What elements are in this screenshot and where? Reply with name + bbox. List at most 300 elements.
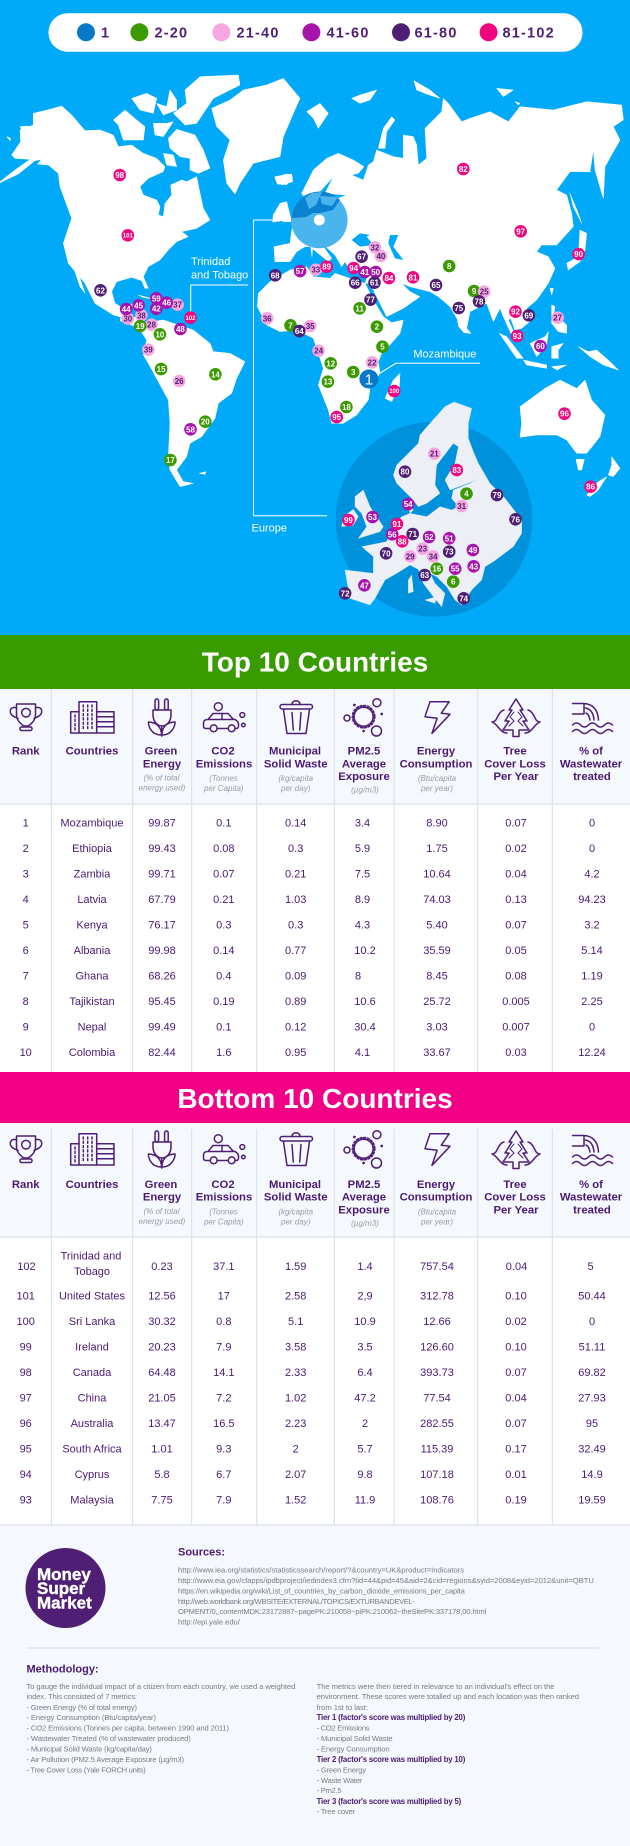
table rows: China [78,1393,107,1405]
table rows: 0.12 [285,1022,306,1034]
rank markers: world: 60 [536,342,545,351]
table rows: 2.25 [581,996,603,1008]
rank markers: europe inset: 72 [341,589,350,598]
table rows: 0 [589,1316,595,1328]
rank markers: world: 65 [432,281,441,290]
table rows: 2 [362,1418,368,1430]
table rows: 0.07 [505,1367,527,1379]
rank markers: europe inset: 49 [468,546,478,555]
table rows: 5.1 [288,1316,303,1328]
table rows: 10.2 [354,945,376,957]
rank markers: world: 78 [475,297,484,306]
table header labels: CO2 [211,746,235,758]
table rows: 8.45 [426,971,448,983]
table header labels: (% of total [143,774,180,782]
table header labels: Green [145,746,177,758]
rank markers: europe inset: 34 [429,552,438,561]
table header labels: Solid Waste [264,758,328,770]
table header labels: Solid Waste [264,1192,328,1204]
table rows: 6 [23,945,29,957]
rank markers: world: 97 [516,227,526,236]
table header labels: Wastewater [560,1192,623,1204]
inland seas [352,233,403,260]
rank markers: world: 67 [357,253,367,262]
methodology left column: index. This consisted of 7 metrics: [26,1692,137,1701]
table rows: 95 [586,1418,598,1430]
methodology right column: - Energy Consumption [317,1744,390,1754]
table header labels: Energy [417,746,456,758]
methodology right column: - CO2 Emissions [317,1724,370,1732]
table rows: 0.007 [502,1022,530,1034]
table rows: 0.13 [505,894,527,906]
table rows: 0.1 [216,1022,231,1034]
rank markers: world: 18 [342,403,351,412]
logo: moneysupermarket: Money [37,1565,91,1584]
rank markers: world: 45 [134,301,144,310]
table rows: 1.02 [285,1393,306,1405]
rank markers: world: 84 [384,274,394,283]
table rows: 10 [20,1047,32,1059]
methodology right column: - Municipal Solid Waste [317,1734,393,1743]
table rows: 0.4 [216,971,231,983]
table rows: Ethiopia [72,843,113,855]
table rows: 0.02 [505,1316,527,1328]
methodology right column: - Green Energy [317,1766,366,1774]
table rows: 69.82 [578,1367,606,1379]
rank markers: world: 5 [380,343,385,352]
table rows: 37.1 [213,1261,235,1273]
heading band: bottom 10 [0,1072,630,1123]
table rows: 17 [218,1291,230,1303]
table rows: 12.66 [423,1316,451,1328]
table rows: 13.47 [148,1418,176,1430]
table rows: 1.03 [285,894,306,906]
table header labels: (µg/m3) [351,786,379,795]
rank markers: world: 27 [553,314,563,323]
rank markers: europe inset: 29 [406,552,415,561]
table rows: 94.23 [578,894,606,906]
table rows: 0.10 [505,1342,527,1354]
legend: 81-102 [502,26,555,42]
table header labels: (Btu/capita [418,774,457,783]
table rows: 5.8 [154,1469,170,1481]
table rows: 67.79 [148,894,176,906]
table rows: 99.49 [148,1022,176,1034]
table rows: 1.52 [285,1495,306,1507]
table rows: 8 [355,971,361,983]
table header labels: (Btu/capita [418,1207,457,1216]
rank markers: europe inset: 70 [382,549,391,558]
table rows: 3.58 [285,1342,306,1354]
table rows: 5 [23,920,29,932]
label: trinidad and tobago: and Tobago [191,269,248,281]
table rows [17,1251,606,1507]
table rows: 0 [589,1022,595,1034]
table header labels: Cover Loss [484,1192,546,1204]
table rows: 82.44 [148,1047,176,1059]
table rows: 8.90 [426,818,448,830]
table rows: 2.33 [285,1367,306,1379]
table header icons [10,1131,612,1168]
rank markers: world: 17 [166,456,175,465]
table header labels: treated [573,771,611,783]
rank markers: world: 41 [360,268,370,277]
table rows: 5.7 [357,1444,373,1456]
table header labels: Per Year [493,1204,539,1216]
table header labels: Energy [143,758,182,770]
table rows: 7.9 [216,1495,231,1507]
table: top 10 countries [0,689,630,1072]
table rows: 19.59 [578,1495,606,1507]
europe land [342,402,522,607]
table header labels: PM2.5 [348,746,380,758]
table rows: 30.32 [148,1316,176,1328]
rank markers: world: 32 [370,243,380,252]
rank markers: europe inset: 71 [408,530,418,539]
rank markers: world: 68 [271,271,280,280]
rank markers: world: 48 [176,325,185,334]
table rows: 0.005 [502,996,530,1008]
rank markers: world: 62 [96,286,105,295]
table rows: Ghana [75,971,109,983]
rank markers: world: 50 [371,268,381,277]
methodology right column: - Waste Water [317,1776,363,1785]
rank markers: world: 57 [296,267,305,276]
table rows: 101 [17,1291,35,1303]
table rows: Malaysia [70,1495,115,1507]
table rows: 100 [17,1316,35,1328]
legend [48,13,582,52]
table rows: 95.45 [148,996,176,1008]
logo: moneysupermarket [26,1548,106,1628]
label: trinidad and tobago: Trinidad [191,256,230,268]
table rows: 21.05 [148,1393,176,1405]
table header labels: Countries [66,746,118,758]
rank markers: world: 30 [123,314,133,324]
table rows: 1.19 [581,971,603,983]
table rows: 107.18 [420,1469,454,1481]
table rows: 0.1 [216,818,231,830]
table rows: South Africa [62,1444,123,1456]
table header labels [12,746,623,795]
table header labels: CO2 [211,1179,235,1191]
south america, africa and madagascar [140,267,403,487]
rank markers: world: 7 [288,321,293,330]
rank markers: europe inset: 56 [388,530,397,539]
table rows: 0.04 [505,869,527,881]
table header labels: Wastewater [560,758,623,770]
table rows: 0.3 [288,920,303,932]
rank markers: europe inset: 47 [360,581,369,590]
table rows: 95 [20,1444,32,1456]
table rows: 1.6 [216,1047,231,1059]
table rows: 98 [20,1367,32,1379]
table rows: 0.14 [213,945,235,957]
methodology right column: - Pm2.5 [317,1786,342,1795]
table rows: 27.93 [578,1393,606,1405]
table rows: 93 [20,1495,32,1507]
table header labels: (Tonnes [209,774,238,783]
table rows: 96 [20,1418,32,1430]
table rows: 108.76 [420,1495,454,1507]
table rows: 76.17 [148,920,176,932]
rank markers: europe inset: 63 [420,571,430,580]
rank markers: europe inset: 4 [464,490,469,499]
rank markers: world: 69 [524,311,534,320]
rank markers: world: 8 [447,262,452,271]
table rows: 97 [20,1393,32,1405]
rank markers: world: 20 [201,418,210,427]
methodology heading: Methodology: [26,1663,99,1675]
table rows: 3.5 [357,1342,373,1354]
rank markers: world: 61 [370,279,379,288]
table rows: 10.9 [354,1316,376,1328]
table header labels: % of [579,746,603,758]
table rows: Colombia [69,1047,116,1059]
table header labels: Exposure [338,771,390,783]
rank markers: world: 102 [185,316,196,322]
table rows: 4.3 [355,920,370,932]
connector: mozambique [380,363,480,373]
table rows: 0 [589,843,595,855]
rank markers: world: 2 [375,323,380,332]
table rows: 0.14 [285,818,306,830]
rank markers: world: 95 [332,413,342,422]
logo: moneysupermarket: Super [37,1579,86,1598]
rank markers: world: 1 [365,372,373,388]
rank markers: world: 46 [162,299,172,308]
table rows: Albania [74,945,111,957]
rank markers: world: 101 [123,234,133,240]
connector: trinidad and tobago [191,285,248,323]
sources: http://www.iea.org/statistics/statisticssearch/report/?&country=UK&product=Indicators [178,1566,464,1574]
table rows: 0.08 [505,971,527,983]
methodology right column: - Tree cover [317,1807,356,1816]
table rows: 33.67 [423,1047,451,1059]
table header labels: per Capita) [203,1217,244,1226]
label: trinidad and tobago [191,256,248,281]
heading band: bottom 10: Bottom 10 Countries [177,1083,453,1114]
rank markers: world: 22 [368,358,377,367]
methodology right column: from 1st to last: [317,1703,368,1712]
table rows: 11.9 [355,1495,375,1507]
table header labels: Rank [12,1179,40,1191]
rank markers: europe inset: 76 [511,515,520,524]
rank markers: world: 58 [186,425,195,434]
table header labels: (kg/capita [278,1207,314,1216]
rank markers: world: 96 [560,410,569,419]
table header labels: Consumption [400,758,472,770]
rank markers: europe inset: 55 [451,565,460,574]
logo: moneysupermarket: Market [37,1594,92,1612]
table rows: 2.23 [285,1418,306,1430]
rank markers: europe inset: 51 [445,534,454,543]
table rows: 0.03 [505,1047,527,1059]
rank markers: world: 14 [211,370,220,379]
table rows: 115.39 [421,1444,453,1456]
table header labels: (kg/capita [278,774,314,783]
table rows: Nepal [78,1022,106,1034]
table header labels: Countries [66,1179,118,1191]
table: bottom 10 countries [0,1123,630,1525]
table rows: 0.08 [213,843,235,855]
rank markers: world: 33 [311,266,321,275]
table rows: 74.03 [423,894,451,906]
table header labels: (Tonnes [209,1207,238,1216]
rank markers: europe inset: 43 [469,562,479,571]
rank markers: world: 25 [480,288,489,297]
methodology left column: - Air Pollution (PM2.5 Average Exposure (µg/m3) [26,1755,184,1764]
table rows: Tobago [74,1266,110,1278]
table rows: 7.9 [216,1342,231,1354]
table rows: 5 [587,1261,594,1273]
table rows: 0.04 [505,1393,527,1405]
table header labels: Consumption [400,1192,472,1204]
rank markers: world: 3 [351,368,356,377]
rank markers: world: 75 [454,304,464,313]
south-east asia and oceania [462,303,620,497]
table rows: 4 [23,894,29,906]
table rows: 5.14 [581,945,603,957]
table rows: 8.9 [355,894,370,906]
table rows: 7.75 [151,1495,173,1507]
table header labels: Emissions [196,758,252,770]
rank markers: europe inset: 83 [452,466,462,475]
table rows: Ireland [75,1342,109,1354]
table header labels: (% of total [143,1207,180,1216]
table rows: 2.58 [285,1291,306,1303]
rank markers: world [94,163,597,493]
table rows: 5.9 [355,843,370,855]
rank markers: world: 89 [322,263,332,272]
table rows: 20.23 [148,1342,176,1354]
eurasia, africa north and islands [273,81,623,338]
table rows: 0.09 [285,971,306,983]
table rows: 68.26 [148,971,176,983]
sources [178,1546,594,1627]
table rows: Australia [71,1418,114,1430]
table rows: 102 [17,1261,36,1273]
table rows: 4.2 [584,869,600,881]
methodology left column: - Wastewater Treated (% of wastewater produced) [26,1734,191,1743]
rank markers: europe inset: 88 [398,537,407,546]
table rows: 47.2 [354,1393,376,1405]
rank markers: world: 26 [175,377,184,386]
table rows: 99 [20,1342,32,1354]
table header labels: Average [342,758,386,770]
table rows: 35.59 [423,945,451,957]
rank markers: world: 100 [389,389,400,395]
table rows: 282.55 [420,1418,454,1430]
table rows: 6.4 [357,1367,373,1379]
table rows: 99.71 [148,869,176,881]
table rows: 3 [23,869,29,881]
table header labels: per year) [420,784,453,793]
table rows: 9 [23,1022,29,1034]
methodology left column: - Green Energy (% of total energy) [26,1703,137,1712]
table rows: 6.7 [216,1469,231,1481]
heading band: top 10: Top 10 Countries [202,646,428,678]
table header labels: Municipal [269,1179,321,1191]
table rows: 12.56 [148,1291,176,1303]
rank markers: world: 28 [147,321,156,330]
table rows: 14.9 [581,1469,603,1481]
label: europe: Europe [252,523,287,535]
table rows: 0.05 [505,945,527,957]
rank markers: world: 98 [115,171,125,180]
legend: 41-60 [326,26,370,42]
table rows: 0.10 [505,1291,527,1303]
table rows: 0.21 [213,894,235,906]
table rows: 0.3 [216,920,231,932]
table rows: 4.1 [355,1047,370,1059]
rank markers: world: 35 [306,322,315,331]
methodology left column: - Energy Consumption (Btu/capita/year) [26,1713,156,1722]
table rows: 1.01 [151,1444,173,1456]
methodology left column: To gauge the individual impact of a citizen from each country, we used a weighted [26,1682,295,1691]
table header labels: Energy [417,1179,456,1191]
table rows: 0.07 [505,1418,527,1430]
rank markers: world: 77 [366,296,375,305]
table rows: 30.4 [354,1022,376,1034]
table header labels: Rank [12,746,40,758]
rank markers: world: 9 [472,287,477,296]
legend: 21-40 [236,26,280,42]
table rows: 1 [23,818,29,830]
methodology right column: The metrics were then tiered in relevance to an individual's effect on the [317,1682,554,1691]
table rows: 0.04 [506,1261,527,1273]
rank markers: europe inset: 21 [430,450,439,459]
rank markers: world: 92 [511,308,520,317]
table rows: 0.23 [151,1261,173,1273]
rank markers: europe inset: 54 [404,500,413,509]
table rows: 32.49 [578,1444,606,1456]
rank markers: europe inset: 80 [401,468,410,477]
table rows: 0.3 [288,843,303,855]
table rows: 2 [293,1444,299,1456]
world map landmasses [0,75,623,497]
rank markers: world: 94 [349,264,359,273]
sources: https://en.wikipedia.org/wiki/List_of_countries_by_carbon_dioxide_emissions_per_capita [178,1586,466,1595]
rank markers: world: 59 [152,294,161,303]
legend: 2-20 [154,26,188,42]
table rows: 0.95 [285,1047,306,1059]
legend: 61-80 [414,26,458,42]
rank markers: europe inset: 53 [368,513,377,522]
sources: OPMENT/0,,contentMDK:23172887~pagePK:210058~piPK:210062~theSitePK:337178,00.html [178,1607,487,1616]
table rows: 0.07 [505,920,527,932]
table rows: 0.19 [505,1495,527,1507]
table rows: Sri Lanka [69,1316,116,1328]
table rows: 0.01 [505,1469,527,1481]
table rows: Trinidad and [61,1251,121,1263]
table rows: 3.2 [584,920,600,932]
table rows: Cyprus [75,1469,110,1481]
table rows: 9.8 [357,1469,373,1481]
rank markers: world: 10 [155,330,165,339]
table header labels: Energy [143,1192,182,1204]
table rows: 2.07 [285,1469,306,1481]
table header labels: Exposure [338,1204,390,1216]
methodology left column: - Municipal Solid Waste (kg/capita/day) [26,1744,152,1754]
methodology right column: environment. These scores were totalled up and each location was then ranked [317,1692,579,1701]
table rows: 64.48 [148,1367,176,1379]
label: mozambique: Mozambique [413,349,476,361]
methodology right column: Tier 1 (factor's score was multiplied by 20) [317,1713,466,1722]
sources: http://web.worldbank.org/WBSITE/EXTERNAL/TOPICS/EXTURBANDEVEL- [178,1597,415,1606]
table rows: 99.98 [148,945,176,957]
table header labels: Green [145,1179,177,1191]
